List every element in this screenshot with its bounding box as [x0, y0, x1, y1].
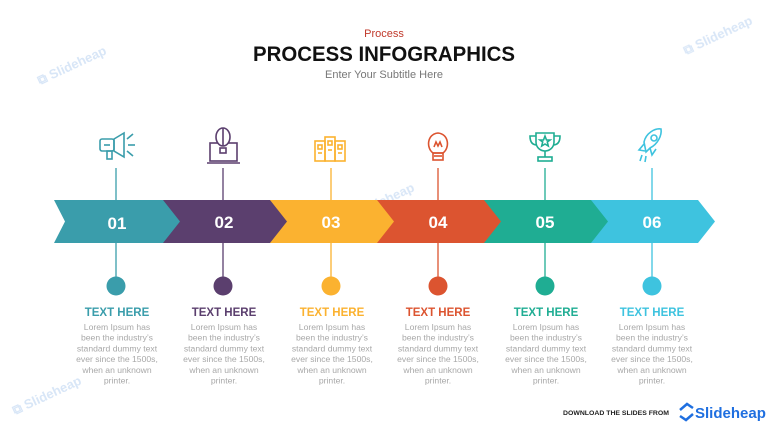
body texts: when an unknown — [81, 365, 152, 375]
body texts — [76, 322, 693, 386]
numbers: 04 — [429, 213, 448, 232]
body texts: printer. — [104, 376, 130, 386]
connectors — [116, 168, 652, 280]
body texts: printer. — [533, 376, 559, 386]
watermarks: ⧉ Slideheap — [10, 373, 84, 418]
body texts: when an unknown — [510, 365, 581, 375]
icon: megaphone — [100, 133, 135, 159]
watermarks: ⧉ Slideheap — [681, 13, 755, 58]
header — [253, 28, 515, 81]
headings: TEXT HERE — [85, 307, 150, 319]
headings: TEXT HERE — [620, 307, 685, 319]
headings — [85, 307, 685, 319]
numbers: 03 — [322, 213, 340, 232]
kicker: Process — [364, 28, 404, 40]
body texts: standard dummy text — [612, 343, 693, 353]
headings: TEXT HERE — [406, 307, 471, 319]
icon: buildings — [315, 137, 345, 161]
icon: rocket — [639, 129, 661, 162]
body texts: standard dummy text — [398, 343, 479, 353]
body texts: Lorem Ipsum has — [405, 322, 471, 332]
body texts: Lorem Ipsum has — [84, 322, 150, 332]
footer — [563, 404, 766, 422]
body texts: standard dummy text — [184, 343, 265, 353]
body texts: printer. — [425, 376, 451, 386]
body texts: been the industry’s — [296, 333, 368, 343]
body texts: ever since the 1500s, — [183, 354, 265, 364]
body texts: printer. — [211, 376, 237, 386]
icon: bulb — [429, 133, 447, 160]
body texts: printer. — [319, 376, 345, 386]
numbers: 02 — [215, 213, 233, 232]
dots — [106, 276, 662, 296]
body texts: Lorem Ipsum has — [191, 322, 257, 332]
title: PROCESS INFOGRAPHICS — [253, 43, 515, 66]
body texts: standard dummy text — [77, 343, 158, 353]
subtitle: Enter Your Subtitle Here — [325, 69, 443, 81]
icon: trophy — [530, 133, 560, 161]
body texts: been the industry’s — [510, 333, 582, 343]
footer: Slideheap — [695, 405, 766, 422]
footer: DOWNLOAD THE SLIDES FROM — [563, 410, 669, 417]
numbers: 06 — [643, 213, 661, 232]
body texts: Lorem Ipsum has — [513, 322, 579, 332]
icon: laptop balloon — [207, 128, 240, 163]
body texts: when an unknown — [402, 365, 473, 375]
headings: TEXT HERE — [300, 307, 365, 319]
body texts: Lorem Ipsum has — [299, 322, 365, 332]
body texts: ever since the 1500s, — [505, 354, 587, 364]
watermarks: ⧉ Slideheap — [35, 43, 109, 88]
body texts: when an unknown — [188, 365, 259, 375]
icon: slideheap logo — [680, 404, 693, 420]
body texts: ever since the 1500s, — [291, 354, 373, 364]
body texts: standard dummy text — [506, 343, 587, 353]
watermarks: ⧉ Slideheap — [343, 180, 417, 225]
body texts: ever since the 1500s, — [611, 354, 693, 364]
numbers: 01 — [108, 214, 126, 233]
numbers: 05 — [536, 213, 554, 232]
headings: TEXT HERE — [514, 307, 579, 319]
body texts: been the industry’s — [188, 333, 260, 343]
body texts: standard dummy text — [292, 343, 373, 353]
arrow band — [54, 200, 715, 243]
body texts: when an unknown — [616, 365, 687, 375]
headings: TEXT HERE — [192, 307, 257, 319]
body texts: been the industry’s — [616, 333, 688, 343]
body texts: ever since the 1500s, — [76, 354, 158, 364]
body texts: when an unknown — [296, 365, 367, 375]
body texts: Lorem Ipsum has — [619, 322, 685, 332]
numbers — [108, 213, 661, 233]
body texts: printer. — [639, 376, 665, 386]
body texts: been the industry’s — [81, 333, 153, 343]
body texts: ever since the 1500s, — [397, 354, 479, 364]
body texts: been the industry’s — [402, 333, 474, 343]
